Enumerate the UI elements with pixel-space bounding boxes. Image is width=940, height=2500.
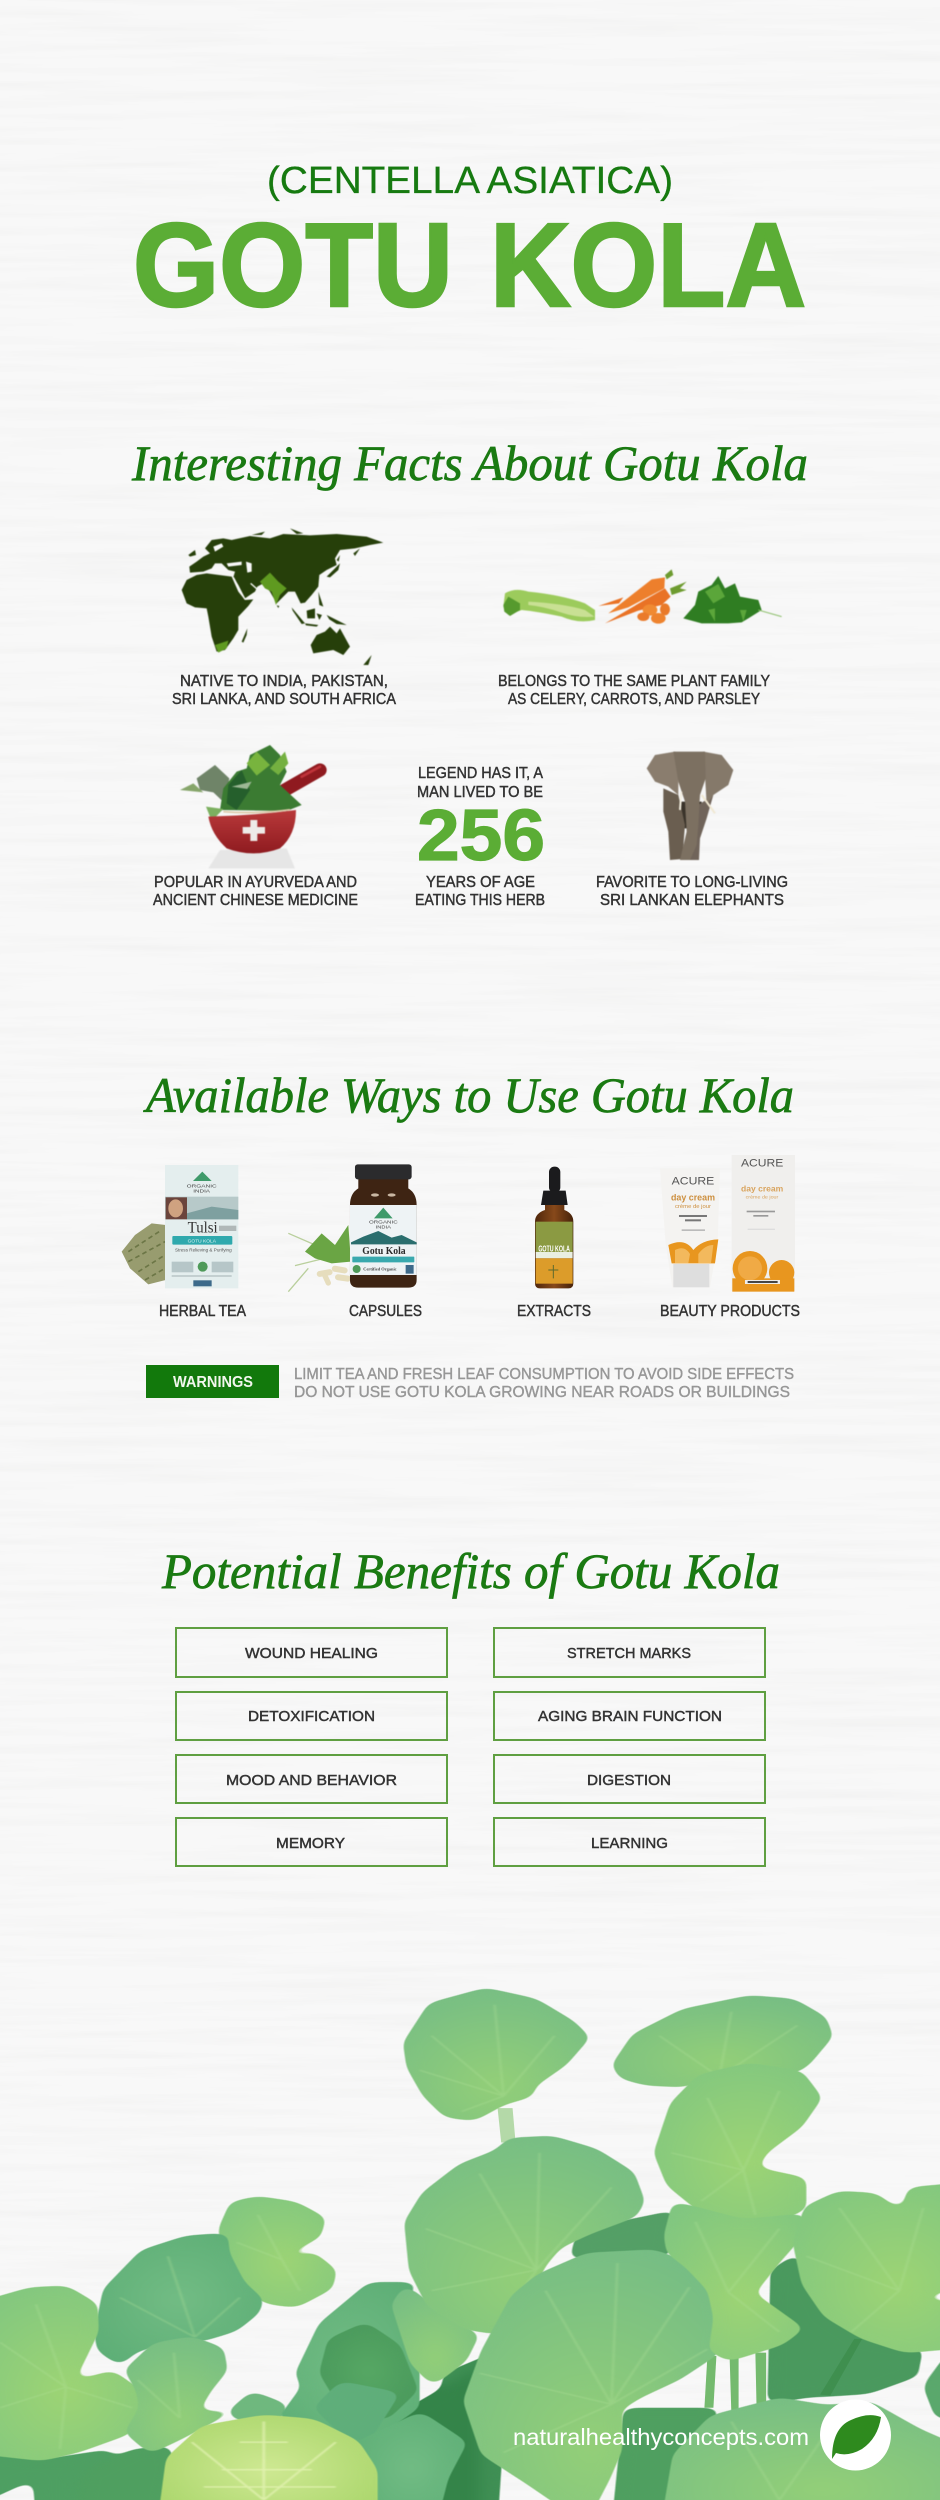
big number: 256 <box>417 796 545 876</box>
icon: capsule bottle <box>350 1164 417 1288</box>
icon: leaves and capsules <box>288 1225 351 1292</box>
product: capsules <box>288 1164 422 1320</box>
benefit: learning <box>494 1818 765 1866</box>
icon: tea box: GOTU KOLA <box>188 1238 217 1244</box>
icon: cream box: day cream <box>741 1184 784 1194</box>
icon: cream tube: crème de jour <box>675 1204 711 1210</box>
leaf: top right <box>611 1995 833 2087</box>
benefit: learning: LEARNING <box>591 1835 668 1852</box>
heading: potential benefits: Potential Benefits of Gotu Kola <box>161 1543 780 1599</box>
icon: tea box: Tulsi <box>188 1219 218 1236</box>
heading: interesting facts: Interesting Facts About Gotu Kola <box>131 435 808 491</box>
fact: ayurveda: ANCIENT CHINESE MEDICINE <box>153 892 358 909</box>
icon: celery carrots parsley <box>503 569 782 624</box>
icon: capsule bottle: ORGANIC <box>369 1220 398 1225</box>
icon: cream box: crème de jour <box>746 1195 779 1201</box>
fact: 256 years: EATING THIS HERB <box>415 892 545 909</box>
leaf: left small <box>218 2196 337 2308</box>
icon: cream tube: ACURE <box>672 1175 714 1187</box>
benefit: detoxification: DETOXIFICATION <box>248 1708 375 1725</box>
benefit: digestion: DIGESTION <box>587 1772 671 1789</box>
warning text: DO NOT USE GOTU KOLA GROWING NEAR ROADS OR BUILDINGS <box>294 1384 790 1401</box>
icon: cream tube: day cream <box>671 1193 715 1203</box>
icon: dropper bottle: GOTU KOLA <box>538 1243 570 1253</box>
leaf: top centre <box>403 1988 591 2121</box>
logo badge <box>820 2400 891 2470</box>
benefit: stretch marks <box>494 1628 765 1677</box>
gotu kola foliage <box>0 1988 940 2500</box>
icon: capsule bottle: Certified Organic <box>363 1266 397 1271</box>
icon: elephant <box>647 752 733 860</box>
benefit: stretch marks: STRETCH MARKS <box>567 1645 691 1662</box>
warnings <box>146 1365 794 1401</box>
caption: NATIVE TO INDIA, PAKISTAN, <box>180 673 388 690</box>
stems <box>498 2108 862 2415</box>
caption: POPULAR IN AYURVEDA AND <box>154 874 357 891</box>
icon: mortar and herbs <box>180 745 320 868</box>
benefit: wound healing: WOUND HEALING <box>245 1645 378 1662</box>
label: EXTRACTS <box>517 1303 591 1320</box>
fact: elephants: SRI LANKAN ELEPHANTS <box>600 892 784 909</box>
fact: elephants <box>596 752 788 909</box>
icon: capsule bottle: INDIA <box>376 1224 391 1229</box>
benefit: digestion <box>494 1755 765 1803</box>
icon: cream box <box>732 1155 795 1292</box>
benefit: aging brain function <box>494 1692 765 1740</box>
warning badge: WARNINGS <box>173 1374 253 1391</box>
heading: available ways: Available Ways to Use Gotu Kola <box>143 1067 794 1123</box>
main title <box>133 199 806 332</box>
title block <box>133 160 806 332</box>
product: extracts <box>517 1167 591 1320</box>
fact: 256 years: MAN LIVED TO BE <box>417 784 543 801</box>
warning text <box>294 1366 794 1401</box>
product: beauty products <box>660 1155 800 1320</box>
leaf: left large <box>94 2233 264 2366</box>
warning text: LIMIT TEA AND FRESH LEAF CONSUMPTION TO AVOID SIDE EFFECTS <box>294 1366 794 1383</box>
benefits grid <box>176 1628 765 1866</box>
legend text: LEGEND HAS IT, A <box>418 765 544 782</box>
icon: tea box: Stress Relieving & Purifying <box>175 1248 232 1253</box>
benefit: detoxification <box>176 1692 447 1740</box>
leaf: centre upper <box>404 2136 645 2335</box>
icon: cream box: ACURE <box>741 1158 783 1170</box>
fact: plant family <box>498 569 782 708</box>
fact: native regions: SRI LANKA, AND SOUTH AFRICA <box>172 691 397 708</box>
icon: tea box: INDIA <box>193 1188 211 1193</box>
product: herbal tea <box>122 1165 247 1320</box>
icon: cream tube <box>660 1168 720 1287</box>
fact: plant family: AS CELERY, CARROTS, AND PARSLEY <box>508 691 760 708</box>
icon: tea box: ORGANIC <box>187 1183 218 1188</box>
benefit: aging brain function: AGING BRAIN FUNCTION <box>538 1708 722 1725</box>
icon: dried herb pile <box>122 1223 166 1284</box>
label: CAPSULES <box>349 1303 422 1320</box>
warning badge <box>146 1365 279 1398</box>
label: BEAUTY PRODUCTS <box>660 1303 800 1320</box>
benefit: memory: MEMORY <box>276 1835 345 1852</box>
fact: native regions <box>172 528 397 708</box>
main title: GOTU <box>133 199 453 332</box>
label: HERBAL TEA <box>159 1303 247 1320</box>
back dark foliage <box>0 2210 940 2500</box>
leaf: far right <box>793 2180 940 2353</box>
leaf cluster: middle <box>277 2282 480 2500</box>
benefit: mood and behavior <box>176 1755 447 1803</box>
website footer <box>513 2400 891 2470</box>
main title: KOLA <box>490 199 806 332</box>
icon: world map <box>182 528 383 665</box>
benefit: mood and behavior: MOOD AND BEHAVIOR <box>226 1772 397 1789</box>
leaf: centre lower <box>463 2249 722 2500</box>
icon: capsule bottle: Gotu Kola <box>362 1246 406 1257</box>
leaf: right centre <box>664 2201 806 2362</box>
benefit: wound healing <box>176 1628 447 1677</box>
leaf: right upper <box>653 2063 823 2226</box>
icon: dropper bottle <box>535 1167 573 1288</box>
icon: tea box <box>165 1165 238 1288</box>
fact: 256 years <box>415 765 545 909</box>
caption: FAVORITE TO LONG-LIVING <box>596 874 788 891</box>
leaf: lower left <box>124 2336 237 2454</box>
leaf: yellow green <box>157 2415 378 2500</box>
caption: BELONGS TO THE SAME PLANT FAMILY <box>498 673 770 690</box>
fact: ayurveda <box>153 745 358 909</box>
leaf: lower right <box>661 2397 940 2500</box>
leaf: far left <box>0 2285 149 2461</box>
subtitle: (CENTELLA ASIATICA) <box>267 160 673 202</box>
benefit: memory <box>176 1818 447 1866</box>
caption: YEARS OF AGE <box>426 874 535 891</box>
url text: naturalhealthyconcepts.com <box>513 2424 809 2450</box>
